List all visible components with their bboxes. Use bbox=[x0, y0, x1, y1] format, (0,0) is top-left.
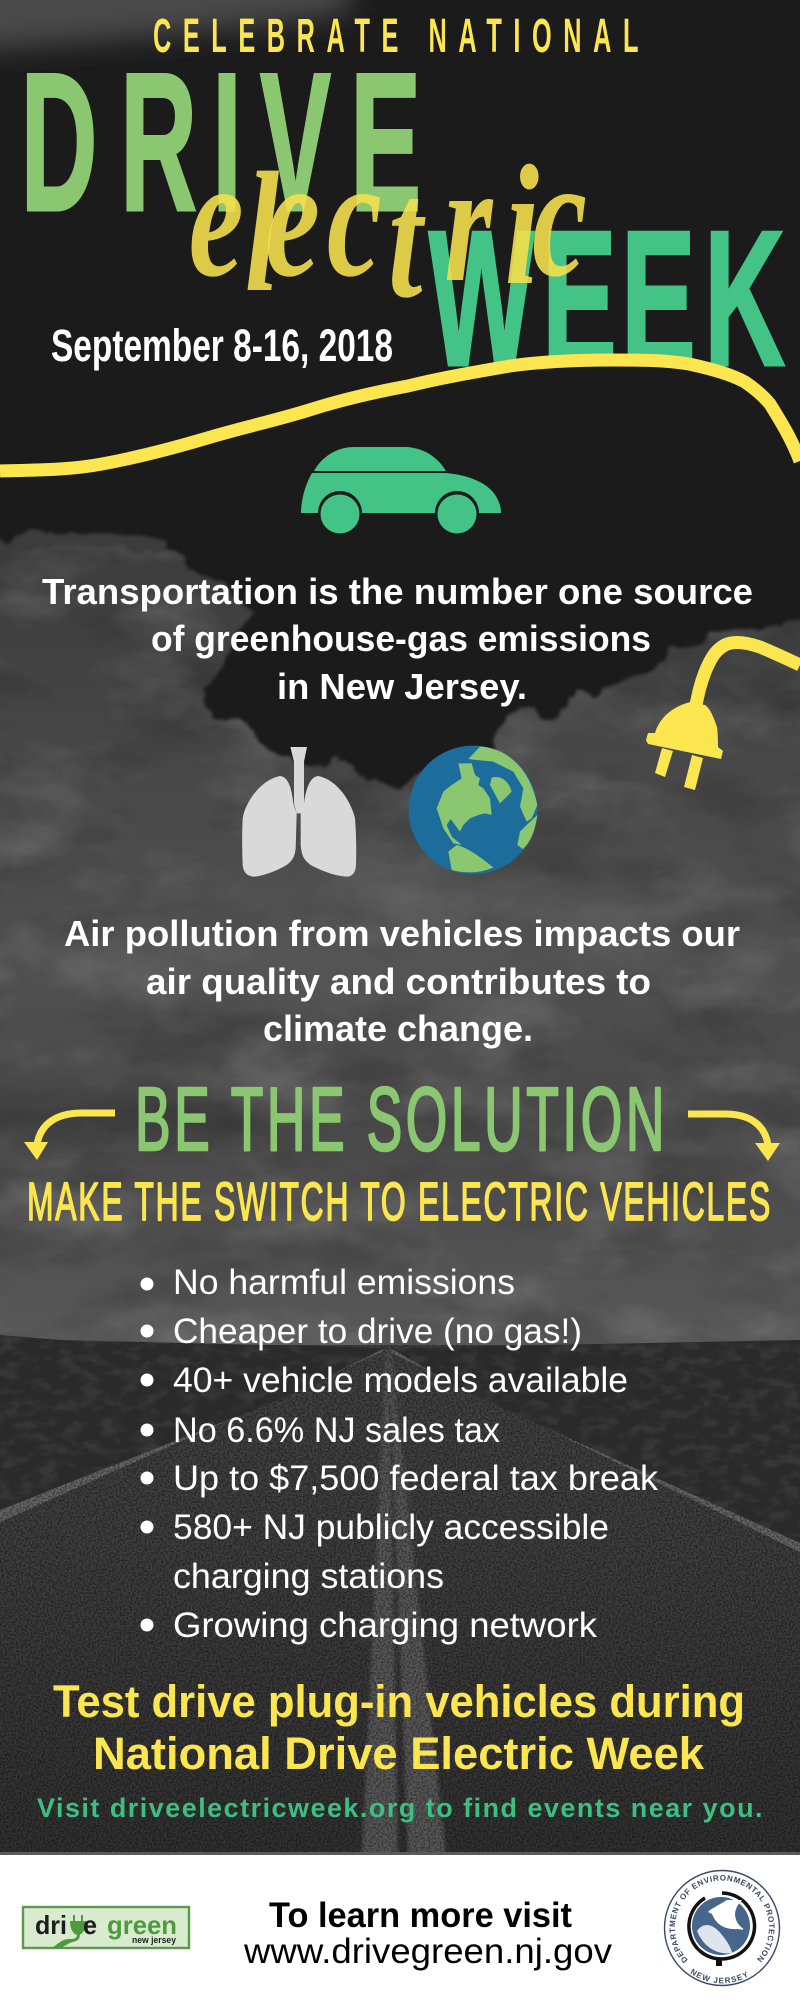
road edge line left bbox=[0, 1349, 384, 1522]
logo: drive green: dri bbox=[35, 1910, 67, 1940]
title: week: WEEK bbox=[429, 191, 785, 407]
event dates: September 8-16, 2018 bbox=[51, 320, 393, 371]
bullet: charging network: Growing charging network bbox=[173, 1606, 598, 1645]
bullet: charging stations bbox=[140, 1508, 609, 1596]
text: transportation statement: in New Jersey. bbox=[277, 666, 527, 707]
text: air pollution statement bbox=[64, 913, 740, 1049]
roadside vegetation bbox=[0, 1330, 800, 1550]
sky clouds bbox=[0, 500, 800, 1360]
icon: green car bbox=[301, 447, 501, 535]
text: transportation statement bbox=[42, 571, 753, 707]
bullet: cheaper to drive: Cheaper to drive (no gas!) bbox=[173, 1312, 582, 1351]
link line: events: Visit driveelectricweek.org to find events near you. bbox=[37, 1793, 764, 1823]
seal: nj department of environmental protection: NEW JERSEY bbox=[690, 1968, 747, 1984]
logo: drive green bbox=[23, 1907, 189, 1948]
logo: drive green: e bbox=[83, 1910, 97, 1940]
seal: nj department of environmental protection: DEPARTMENT OF ENVIRONMENTAL PROTECTION bbox=[669, 1875, 775, 1964]
icon: lungs bbox=[242, 747, 356, 877]
text: transportation statement: Transportation is the number one source bbox=[42, 571, 753, 612]
road centre line bbox=[362, 1350, 446, 1855]
logo: drive green: green bbox=[107, 1910, 177, 1940]
icon: plug and cord bbox=[646, 643, 800, 790]
text: air pollution statement: climate change. bbox=[263, 1008, 533, 1049]
bullet: federal tax break: Up to $7,500 federal tax break bbox=[173, 1459, 659, 1498]
benefits list bbox=[140, 1263, 659, 1645]
text: air pollution statement: air quality and contributes to bbox=[146, 961, 651, 1002]
top-left cloud bbox=[0, 0, 350, 52]
small cloud wisp bbox=[0, 529, 170, 565]
footer panel bbox=[0, 1852, 800, 2000]
bullet: models available: 40+ vehicle models available bbox=[173, 1361, 628, 1400]
logo: drive green: new jersey bbox=[132, 1935, 177, 1946]
bullet: charging stations: charging stations bbox=[173, 1557, 444, 1596]
yellow charging cord wave bbox=[0, 360, 800, 471]
bullet: no sales tax: No 6.6% NJ sales tax bbox=[173, 1411, 500, 1450]
arrow: right bbox=[688, 1114, 780, 1161]
call to action: test drive bbox=[53, 1676, 745, 1779]
road edge line right bbox=[388, 1349, 800, 1552]
title: electric script: electric bbox=[189, 122, 587, 334]
title: drive: DRIVE bbox=[21, 32, 421, 252]
plug glyph in logo bbox=[52, 1915, 86, 1948]
footer text: learn more: To learn more visit bbox=[269, 1896, 572, 1935]
footer text: learn more: www.drivegreen.nj.gov bbox=[243, 1932, 613, 1971]
bullet: charging stations: 580+ NJ publicly accessible bbox=[173, 1508, 609, 1547]
call to action: test drive: National Drive Electric Week bbox=[93, 1728, 705, 1779]
call to action: test drive: Test drive plug-in vehicles during bbox=[53, 1676, 745, 1727]
text: air pollution statement: Air pollution from vehicles impacts our bbox=[64, 913, 740, 954]
icon: globe bbox=[409, 746, 537, 874]
arrow: left bbox=[24, 1113, 115, 1160]
text: transportation statement: of greenhouse-gas emissions bbox=[151, 618, 651, 659]
footer text: learn more bbox=[243, 1896, 613, 1971]
road scene bbox=[0, 1345, 800, 1855]
bullet: no harmful emissions: No harmful emissions bbox=[173, 1263, 515, 1302]
